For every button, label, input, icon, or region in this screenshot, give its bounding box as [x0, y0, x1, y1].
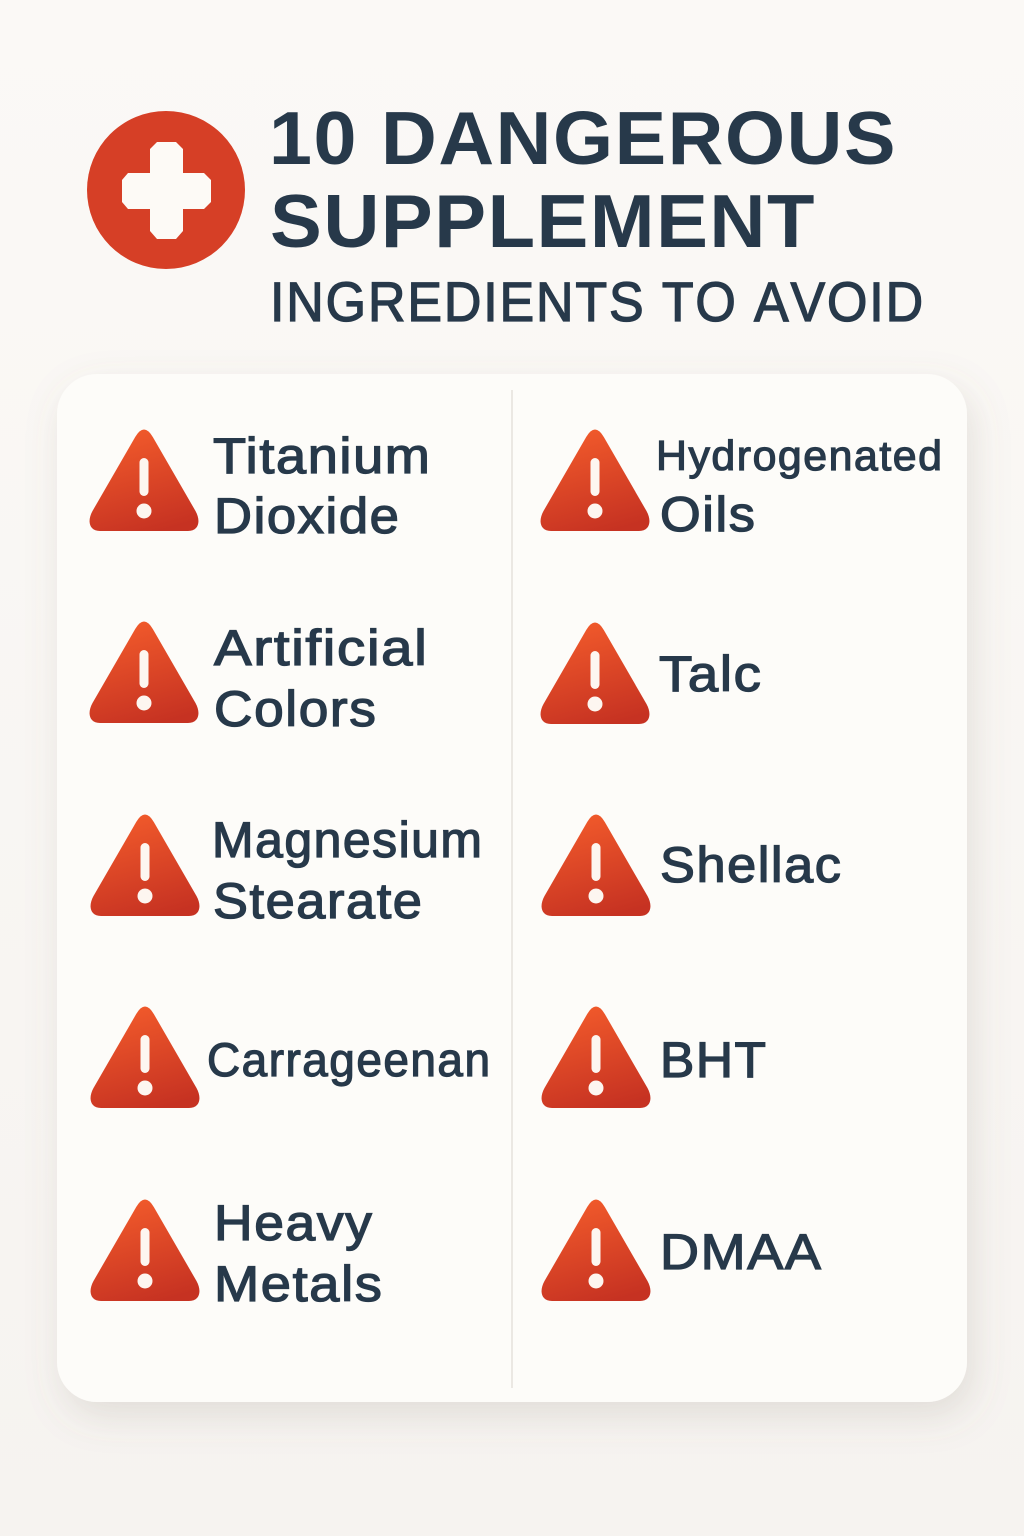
item: Titanium Dioxide: Dioxide [214, 488, 400, 544]
title [269, 96, 925, 333]
item: Artificial Colors: Artificial [214, 620, 428, 676]
item: Heavy Metals: Heavy [214, 1195, 374, 1251]
item: Heavy Metals [91, 1195, 383, 1312]
item: Shellac [542, 814, 842, 916]
item: Hydrogenated Oils: Oils [660, 488, 756, 542]
item: Talc: Talc [659, 646, 762, 702]
item: Magnesium Stearate [91, 812, 483, 929]
item: BHT [542, 1006, 768, 1108]
item: DMAA: DMAA [660, 1224, 822, 1280]
item: Heavy Metals: Metals [214, 1256, 384, 1312]
item: Titanium Dioxide [90, 428, 431, 544]
item: Magnesium Stearate: Magnesium [212, 812, 484, 868]
title: SUPPLEMENT [270, 179, 816, 263]
item: Hydrogenated Oils [541, 430, 944, 542]
item: Titanium Dioxide: Titanium [213, 428, 432, 484]
item: Artificial Colors [90, 620, 428, 737]
item: BHT: BHT [660, 1032, 768, 1088]
icon: medical cross badge [87, 111, 245, 269]
item: Hydrogenated Oils: Hydrogenated [656, 432, 944, 479]
item: Talc [541, 622, 762, 724]
item: Shellac: Shellac [660, 837, 842, 893]
title: INGREDIENTS TO AVOID [270, 270, 925, 333]
item: Carrageenan [91, 1006, 491, 1108]
item: Magnesium Stearate: Stearate [213, 873, 424, 929]
item: DMAA [542, 1200, 822, 1301]
panel: ingredients card [57, 374, 967, 1402]
item: Artificial Colors: Colors [214, 681, 378, 737]
item: Carrageenan: Carrageenan [207, 1033, 492, 1086]
title: 10 DANGEROUS [269, 96, 897, 180]
